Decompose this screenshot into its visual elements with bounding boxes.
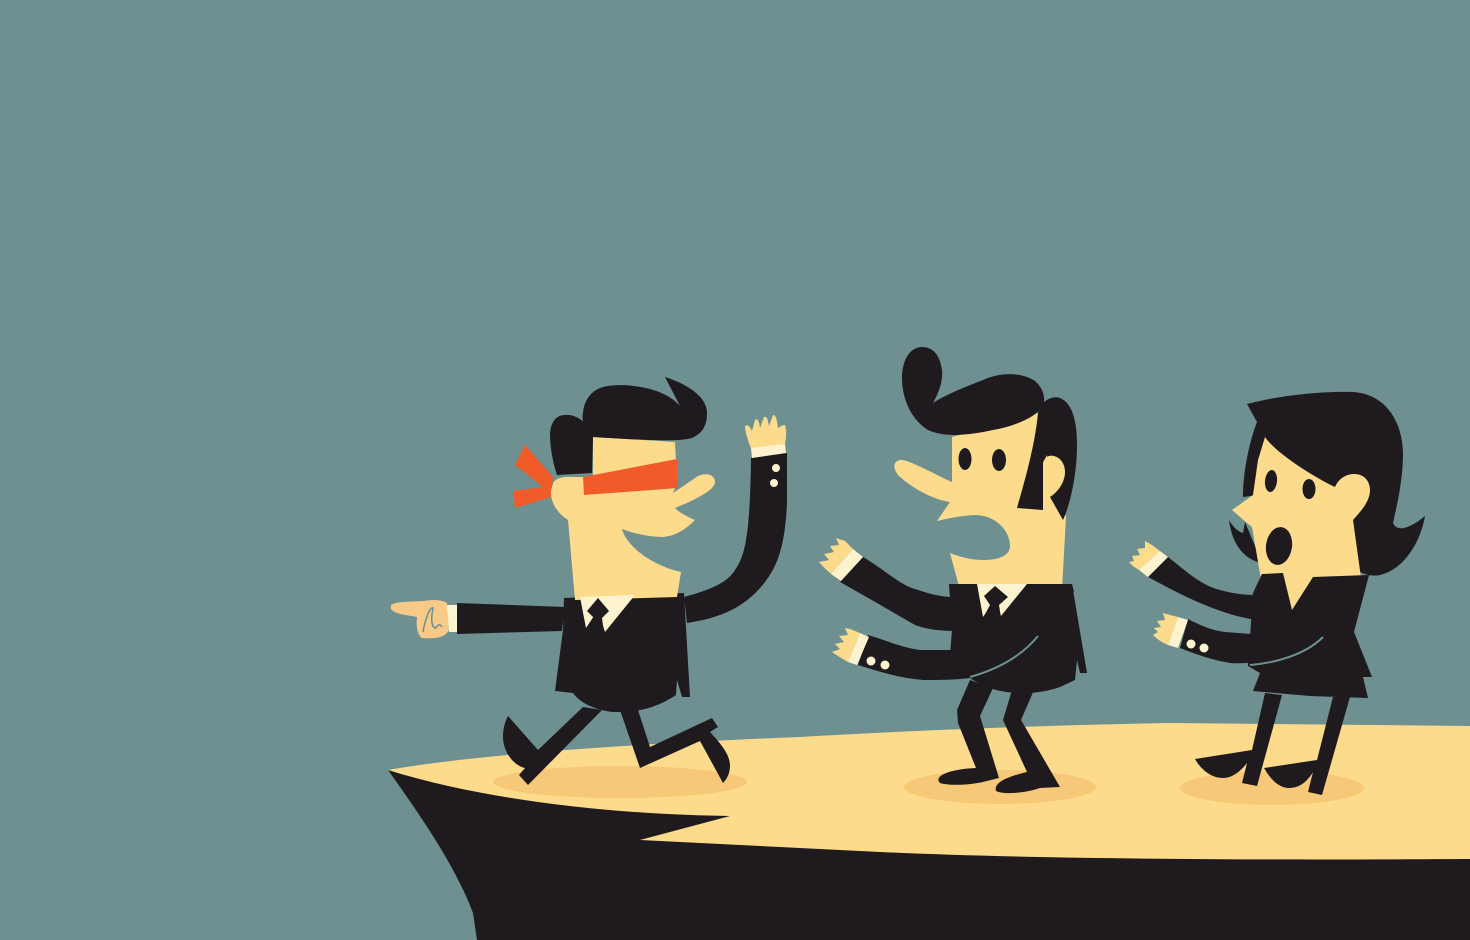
legs and feet (503, 707, 730, 785)
legs and shoes (938, 680, 1060, 793)
blindfold band (583, 459, 678, 495)
shadow: under shouting man (904, 770, 1096, 804)
jacket and skirt (1248, 573, 1372, 698)
neckline skin (1262, 573, 1320, 612)
eyes (958, 448, 1006, 471)
pointing hand and cuff (391, 600, 457, 638)
shirt collar (580, 595, 635, 632)
blindfold ties (513, 445, 553, 508)
reaching upper arm (840, 557, 955, 631)
sleeve crease (970, 636, 1038, 677)
face and neck (551, 437, 715, 600)
pointing arm (457, 603, 565, 634)
shadow: under blindfolded man (493, 766, 747, 798)
shadow: under woman (1180, 771, 1364, 805)
back hair and sideburn (1017, 397, 1077, 520)
left hair flip (1229, 520, 1262, 563)
sleeve crease (1250, 637, 1323, 665)
lower arm (1180, 619, 1323, 663)
cliff: dark rock (388, 770, 1470, 940)
ear (1043, 456, 1065, 497)
character: blindfolded man (391, 377, 787, 785)
jacket (949, 584, 1087, 693)
legs and heels (1195, 693, 1350, 795)
back hair (550, 415, 593, 475)
eyes (1264, 469, 1316, 499)
face (1232, 437, 1370, 585)
ground: sand top of cliff (388, 723, 1470, 859)
face with open mouth (894, 413, 1066, 590)
quiff hair (902, 347, 1044, 435)
open mouth (1263, 525, 1295, 567)
character: shocked woman (1129, 392, 1425, 795)
raised arm (684, 453, 787, 623)
hair (1243, 392, 1425, 576)
shirt collar (977, 584, 1027, 617)
lower hand, cuff and buttons (832, 628, 890, 670)
jacket (555, 593, 690, 712)
tie (587, 598, 609, 633)
top hair (582, 377, 707, 440)
tie (983, 586, 1008, 618)
raised hand and cuff (745, 415, 786, 487)
upper arm (1148, 557, 1258, 620)
lower arm (858, 635, 1037, 680)
upper hand and cuff (1129, 541, 1168, 577)
lower hand, cuff and buttons (1153, 613, 1208, 652)
ear (553, 477, 584, 498)
upper hand and cuff (819, 538, 863, 581)
character: shouting man (819, 347, 1087, 793)
jacket collar band (949, 584, 1074, 592)
